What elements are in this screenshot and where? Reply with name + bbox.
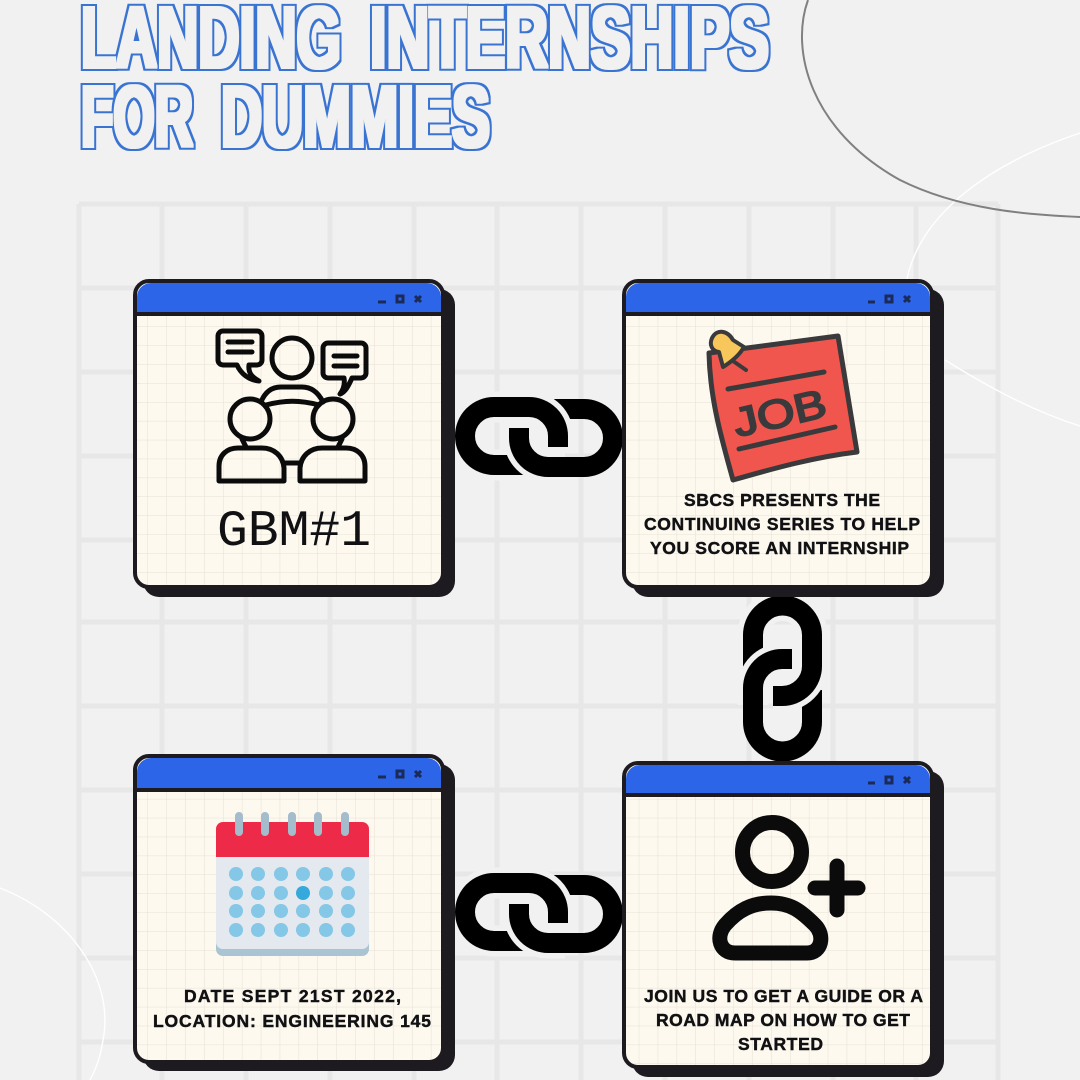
panel: GBM#1 window xyxy=(135,281,455,597)
title: FOR xyxy=(81,68,193,166)
text: join us xyxy=(644,986,923,1054)
text: join us: STARTED xyxy=(738,1034,823,1054)
arrow: chain link top xyxy=(465,407,613,467)
title: DUMMIES xyxy=(221,68,490,166)
text: date and location xyxy=(153,986,431,1031)
panel: date window xyxy=(135,756,455,1071)
icon: job note: JOB xyxy=(729,382,831,446)
text: series intro xyxy=(644,490,920,558)
title xyxy=(81,0,769,166)
text: series intro: CONTINUING SERIES TO HELP xyxy=(644,514,920,534)
text: series intro: SBCS PRESENTS THE xyxy=(684,490,880,510)
text: join us: ROAD MAP ON HOW TO GET xyxy=(656,1010,910,1030)
text: GBM#1: GBM#1 xyxy=(217,504,371,561)
panel: join window xyxy=(624,763,944,1077)
icon: job note xyxy=(709,332,857,480)
text: date and location: LOCATION: ENGINEERING 145 xyxy=(153,1011,431,1031)
icon: add user xyxy=(720,822,858,953)
arrow: chain link right xyxy=(753,606,812,752)
icon: calendar xyxy=(216,816,369,956)
icon: group discussion xyxy=(218,331,366,481)
panel: job window xyxy=(624,281,944,597)
arrow: chain link bottom xyxy=(465,883,613,943)
text: date and location: DATE SEPT 21ST 2022, xyxy=(184,986,401,1006)
text: join us: JOIN US TO GET A GUIDE OR A xyxy=(644,986,923,1006)
text: series intro: YOU SCORE AN INTERNSHIP xyxy=(650,538,909,558)
